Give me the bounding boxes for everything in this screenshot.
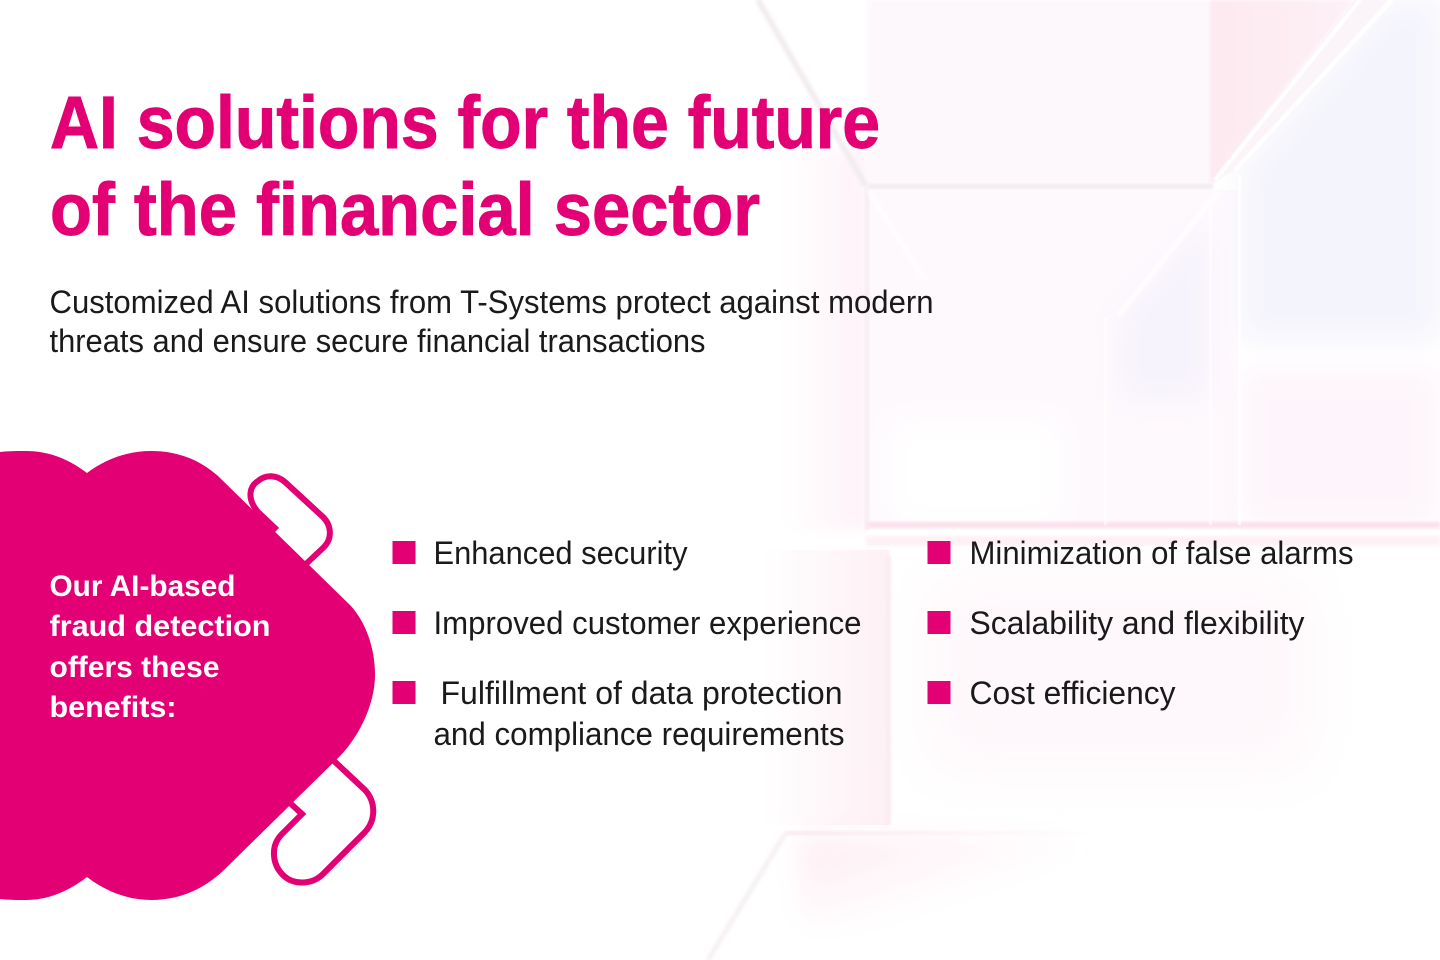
icon: bottom outlined pill [274, 760, 373, 883]
benefit: data protection and compliance [392, 675, 844, 752]
cloud shape [0, 451, 375, 900]
panel: magenta cloud callout [0, 451, 375, 900]
callout text: fraud detection [50, 610, 270, 643]
subtitle [50, 284, 934, 359]
callout text [50, 570, 270, 724]
benefit: scalability and flexibility: Scalability and flexibility [970, 605, 1304, 641]
benefit: data protection and compliance: and compliance requirements [434, 716, 844, 752]
callout text: offers these [50, 651, 220, 684]
title: of the financial sector [50, 168, 760, 251]
subtitle: threats and ensure secure financial transactions [50, 323, 706, 359]
benefit: data protection and compliance: Fulfillment of data protection [440, 675, 842, 711]
title: AI solutions for the future [50, 81, 880, 164]
benefits list: left column [392, 535, 862, 752]
benefits list: right column [928, 535, 1354, 711]
title [50, 81, 880, 251]
icon: top outlined pill [250, 476, 330, 564]
benefit: improved customer experience: Improved customer experience [434, 605, 862, 641]
subtitle: Customized AI solutions from T-Systems protect against modern [50, 284, 934, 320]
benefit: enhanced security: Enhanced security [434, 535, 688, 571]
benefit: cost efficiency: Cost efficiency [970, 675, 1176, 711]
benefit: minimization of false alarms: Minimization of false alarms [970, 535, 1354, 571]
callout text: benefits: [50, 691, 176, 724]
callout text: Our AI-based [50, 570, 236, 603]
